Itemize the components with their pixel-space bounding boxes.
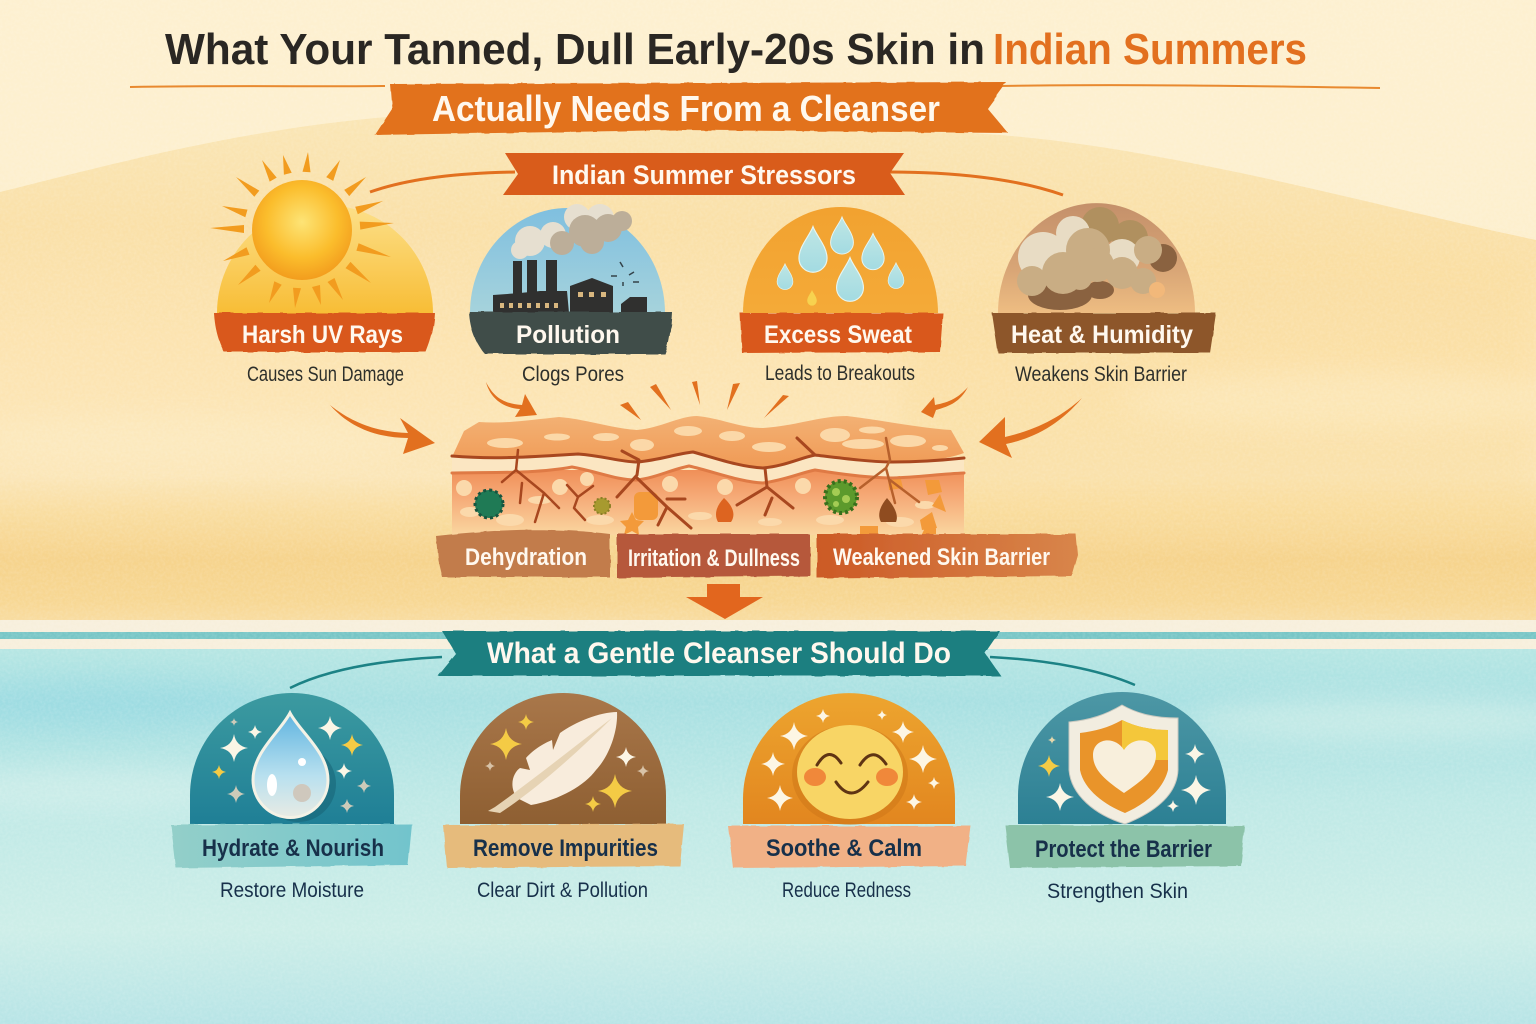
stressor: harsh UV rays — [210, 152, 435, 386]
label band: Heat & Humidity — [1011, 321, 1193, 349]
caption: Strengthen Skin — [1047, 880, 1188, 903]
icon: humid clouds — [998, 203, 1195, 313]
effect label: irritation and dullness: Irritation & Dullness — [628, 545, 800, 572]
caption: Restore Moisture — [220, 879, 364, 902]
benefit: soothe and calm — [728, 693, 971, 902]
caption: Clear Dirt & Pollution — [477, 879, 648, 902]
arrows into skin — [330, 382, 1082, 458]
germs and spots — [475, 481, 897, 522]
label band — [740, 313, 943, 353]
label band: Harsh UV Rays — [242, 321, 403, 349]
label band — [1005, 825, 1245, 868]
label band: Excess Sweat — [764, 321, 913, 349]
stressor: excess sweat — [740, 207, 943, 385]
main heading ribbon: Actually Needs From a Cleanser — [432, 88, 940, 129]
effect label: dehydration — [436, 530, 610, 577]
arrow: down to cleanser section — [686, 584, 763, 619]
stressor: pollution — [469, 204, 672, 386]
label band — [469, 312, 672, 354]
title: What Your Tanned, Dull Early-20s Skin in — [165, 25, 985, 74]
title: Indian Summers — [993, 25, 1307, 74]
label band: Soothe & Calm — [766, 835, 922, 862]
benefit: protect the barrier — [1005, 692, 1245, 903]
effect label: weakened skin barrier: Weakened Skin Barrier — [833, 544, 1050, 571]
section heading ribbon: cleanser: What a Gentle Cleanser Should Do — [487, 637, 951, 670]
icon: smiling face with sparkles — [743, 693, 955, 825]
caption: Clogs Pores — [522, 363, 624, 386]
main heading ribbon — [130, 82, 1380, 135]
benefit: hydrate and nourish — [171, 693, 412, 902]
effect label: weakened skin barrier — [817, 534, 1078, 578]
effect label: dehydration: Dehydration — [465, 544, 587, 571]
arrow: from UV rays — [330, 405, 435, 454]
icon: factory — [470, 204, 665, 313]
label band: Pollution — [516, 321, 620, 349]
caption: Leads to Breakouts — [765, 362, 915, 385]
arrow: from sweat — [921, 387, 968, 418]
label band — [214, 313, 435, 352]
caption: Reduce Redness — [782, 879, 911, 902]
section heading ribbon: cleanser — [290, 631, 1135, 688]
stressors heading ribbon — [370, 153, 1063, 195]
caption: Weakens Skin Barrier — [1015, 363, 1187, 386]
arrow: from pollution — [486, 382, 537, 417]
icon: sweat drops — [743, 207, 938, 313]
icon: water drop with sparkles — [190, 693, 394, 824]
icon: shield with heart — [1018, 692, 1226, 824]
label band — [443, 824, 684, 868]
caption: Causes Sun Damage — [247, 363, 404, 386]
effect label: irritation and dullness — [617, 534, 810, 578]
label band — [992, 313, 1216, 353]
icon: sun — [210, 152, 433, 314]
label band: Hydrate & Nourish — [202, 835, 384, 862]
label band — [171, 824, 412, 868]
arrow: from heat — [979, 398, 1082, 458]
icon: feather with sparkles — [460, 693, 666, 824]
label band — [728, 826, 971, 868]
stressors heading ribbon: Indian Summer Stressors — [552, 160, 856, 190]
benefit: remove impurities — [443, 693, 684, 902]
stressor: heat and humidity — [992, 203, 1216, 386]
label band: Remove Impurities — [473, 835, 658, 862]
impact rays above skin — [620, 381, 789, 420]
illustration: damaged skin cross-section — [452, 416, 964, 535]
label band: Protect the Barrier — [1035, 836, 1212, 863]
